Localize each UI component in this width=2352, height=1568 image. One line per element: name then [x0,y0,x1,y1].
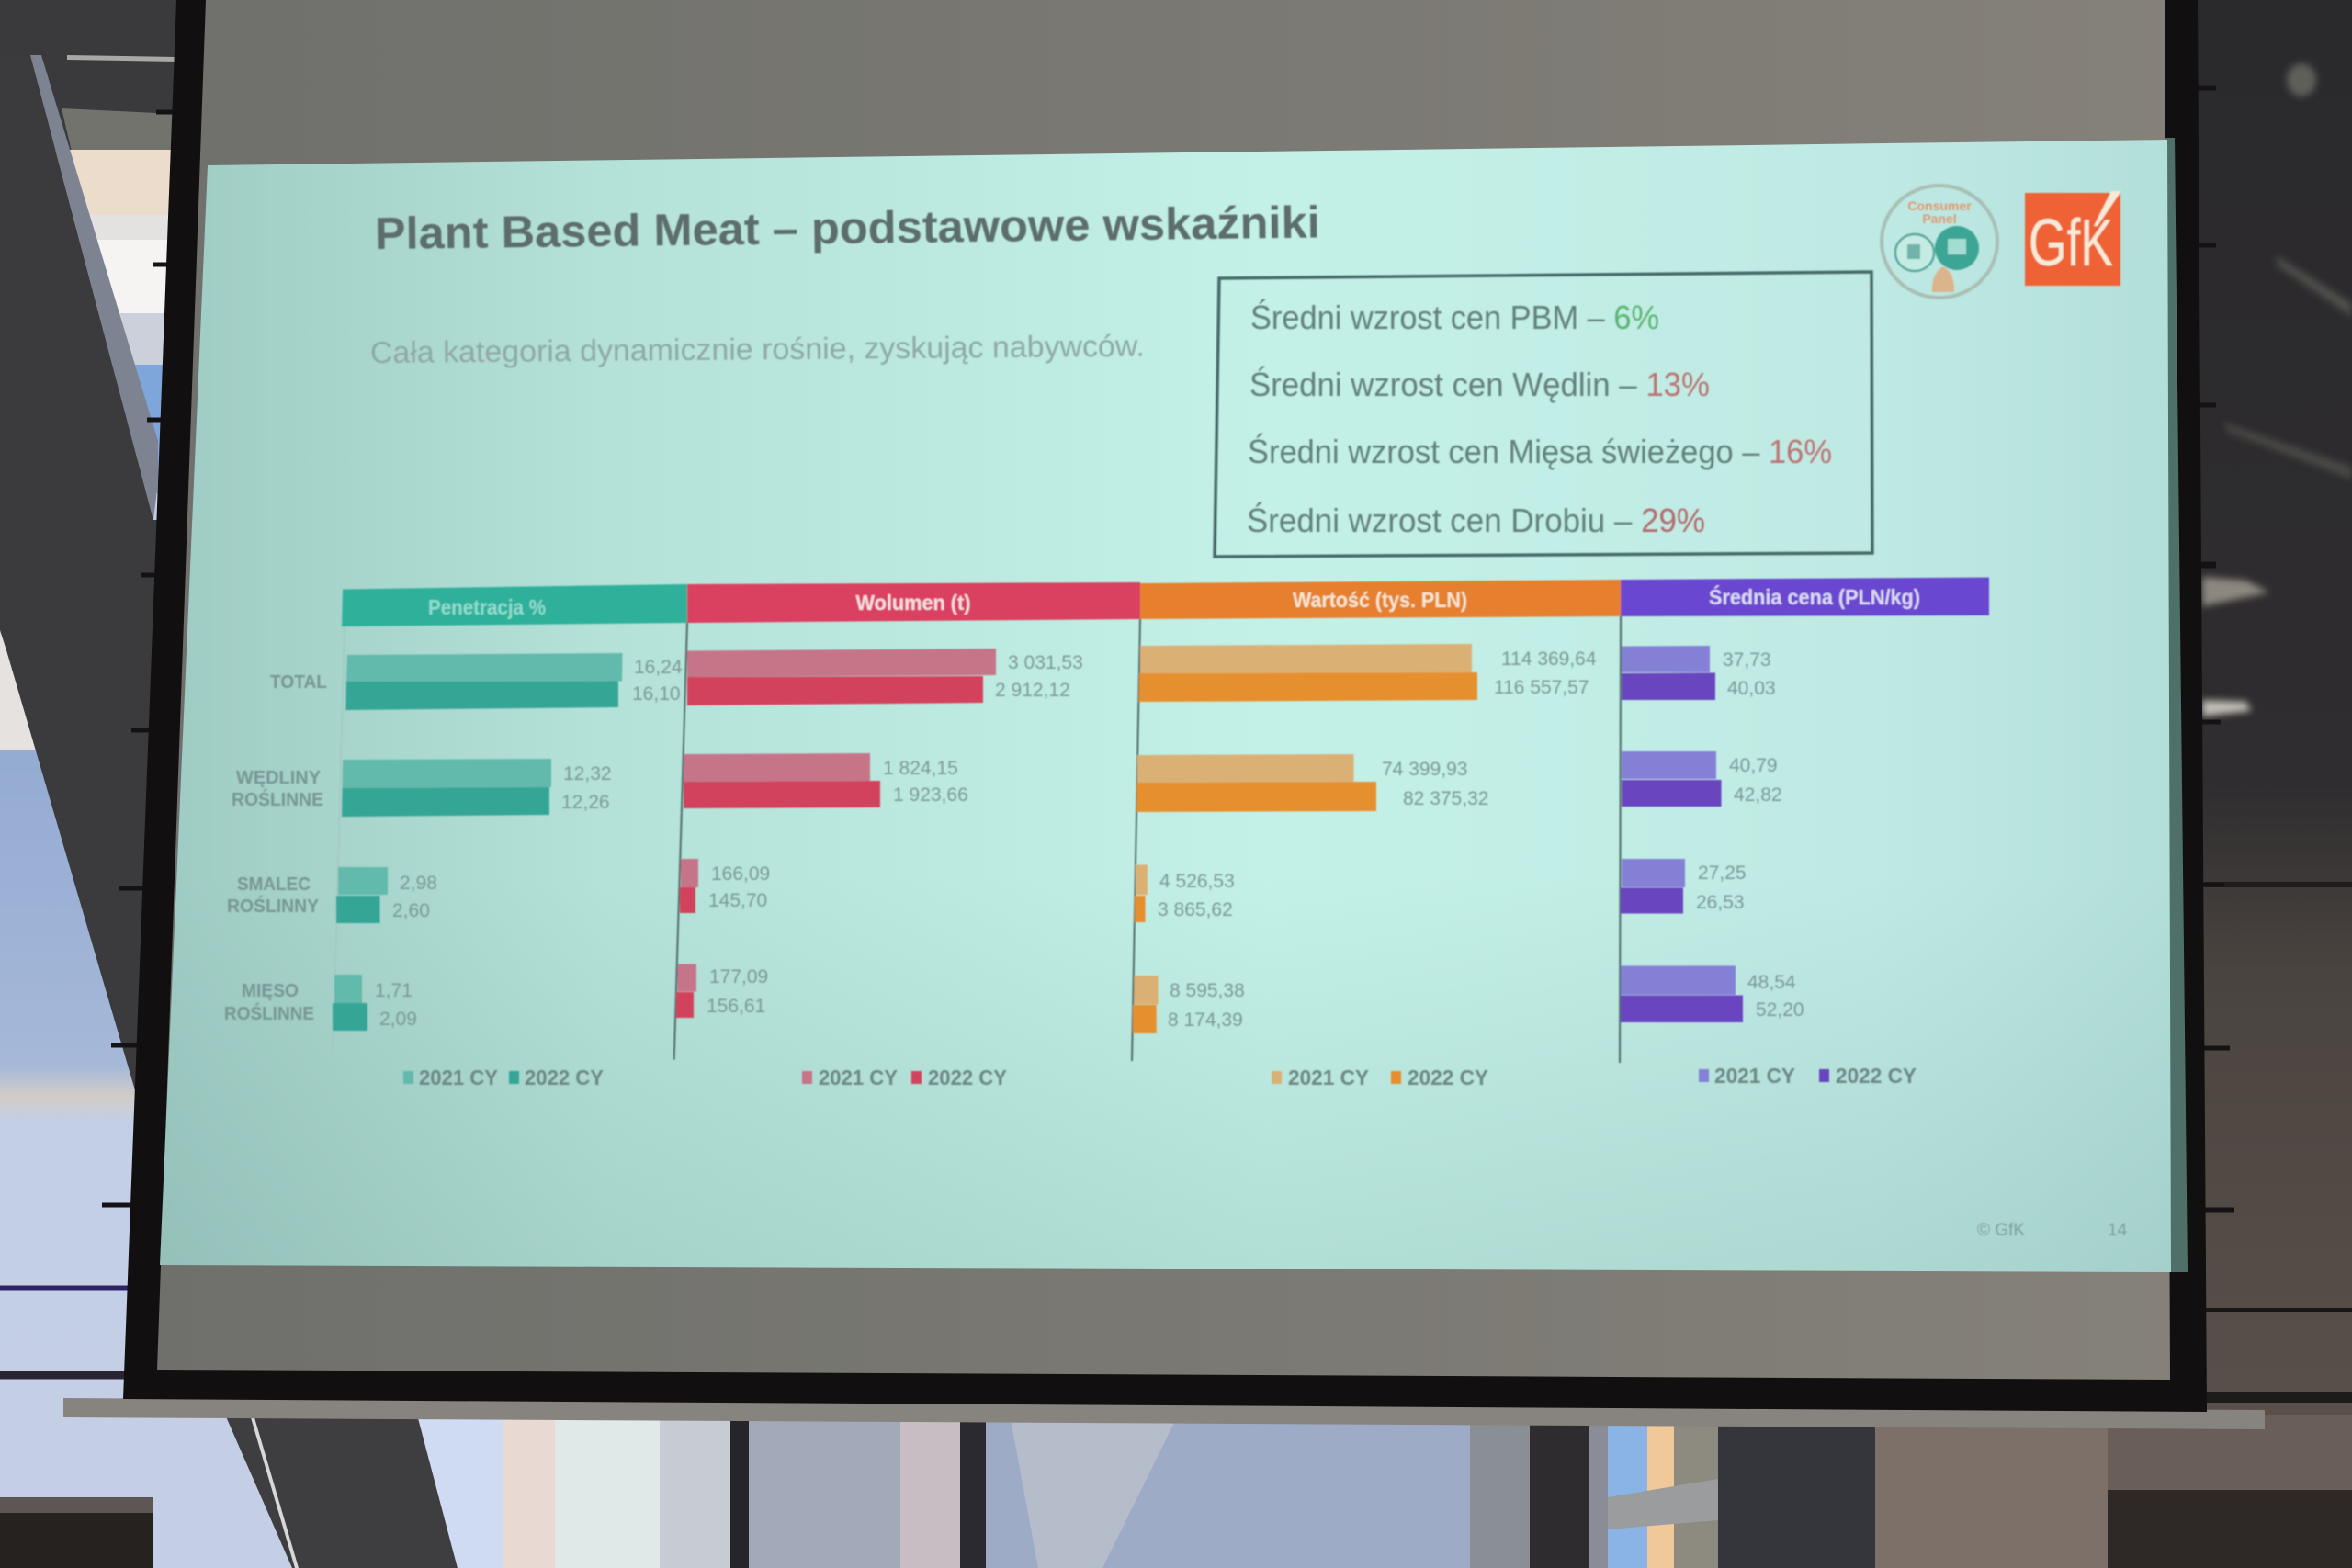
slide background [160,140,2171,1272]
background: below the screen [0,1415,2352,1568]
chart: Wolumen (t) [674,623,1083,1060]
chart: Średnia cena (PLN/kg): 42,82 [1734,784,1782,806]
chart: Penetracja %: 2,09 [379,1009,417,1030]
legend: Wolumen: 2022 CY [928,1066,1007,1089]
chart: Penetracja % [333,626,683,1053]
chart: Penetracja %: 16,24 [634,657,683,678]
chart: Wartość (tys. PLN): 8 174,39 [1168,1010,1243,1031]
slide edge strip [2165,138,2188,1272]
legend: Średnia cena [1699,1064,1917,1088]
chart: Penetracja %: 12,26 [561,792,610,813]
legend: Wartość: 2021 CY [1288,1066,1369,1089]
logo: Consumer Panel: Consumer [1907,198,1972,213]
chart: Średnia cena (PLN/kg): 26,53 [1696,892,1745,913]
header: Wartość: Wartość (tys. PLN) [1293,588,1467,612]
header: Wolumen: Wolumen (t) [856,591,970,615]
callout box: price growth [1215,272,1872,557]
row labels [224,672,327,1024]
background: room left side [0,0,220,1568]
chart: Wolumen (t): 3 031,53 [1008,652,1083,673]
chart: Wolumen (t): 166,09 [711,863,770,885]
chart: Wartość (tys. PLN): 74 399,93 [1382,759,1467,780]
legend: Wartość [1272,1066,1488,1089]
chart: Średnia cena (PLN/kg): 37,73 [1723,649,1771,671]
chart: Średnia cena (PLN/kg): 27,25 [1698,863,1747,884]
legend: Średnia cena: 2022 CY [1836,1064,1917,1088]
chart: Wartość (tys. PLN): 4 526,53 [1159,871,1235,892]
chart: Wolumen (t): 1 923,66 [893,784,968,806]
chart: Wolumen (t): 1 824,15 [883,758,958,779]
screen black frame [123,0,2207,1412]
title: Plant Based Meat – podstawowe wskaźniki [374,197,1320,259]
callout line: PBM: Średni wzrost cen PBM – 6% [1250,298,1659,336]
chart: Wolumen (t): 177,09 [709,966,768,987]
chart: Średnia cena (PLN/kg): 48,54 [1747,972,1796,993]
chart: Średnia cena (PLN/kg): 40,79 [1729,755,1778,776]
header: Wolumen [687,582,1140,623]
slide lower shading [160,140,2171,1272]
callout line: Mięsa świeżego: Średni wzrost cen Mięsa świeżego – 16% [1248,432,1832,470]
grey screen surface [157,0,2170,1380]
legend: Penetracja [403,1066,604,1089]
legend: Wolumen: 2021 CY [819,1066,898,1089]
row label: WĘDLINY ROŚLINNE: ROŚLINNE [232,788,323,810]
chart: Wartość (tys. PLN): 116 557,57 [1494,677,1589,698]
chart: Wartość (tys. PLN): 82 375,32 [1403,788,1488,809]
logo: GfK [2025,191,2121,286]
table column headers [342,577,1989,626]
legend: Wolumen [802,1066,1007,1089]
logo: Consumer Panel: Panel [1922,211,1957,226]
row label: SMALEC ROŚLINNY [227,874,320,917]
row label: TOTAL: TOTAL [270,672,327,693]
legend: Średnia cena: 2021 CY [1714,1064,1795,1088]
chart: Wartość (tys. PLN): 114 369,64 [1501,649,1597,670]
mounting ticks on the screen frame [0,88,2234,1375]
logo: Consumer Panel [1882,186,1997,298]
chart: Penetracja %: 2,98 [400,873,437,894]
row label: WĘDLINY ROŚLINNE [232,768,323,810]
header: Średnia cena: Średnia cena (PLN/kg) [1709,584,1920,609]
footer: copyright: © GfK [1977,1221,2025,1240]
screen rail [63,1398,2265,1429]
background: room right side [2191,0,2352,1568]
chart: Wartość (tys. PLN): 3 865,62 [1158,899,1233,920]
row label: MIĘSO ROŚLINNE: MIĘSO [242,981,299,1001]
footer: page number: 14 [2108,1221,2128,1240]
chart: Średnia cena (PLN/kg): 52,20 [1756,999,1804,1021]
chart: Średnia cena (PLN/kg): 40,03 [1727,678,1776,699]
chart: Wolumen (t): 2 912,12 [995,680,1070,701]
row label: MIĘSO ROŚLINNE [224,981,314,1024]
legend: Penetracja: 2022 CY [525,1066,604,1089]
row label: WĘDLINY ROŚLINNE: WĘDLINY [236,768,322,788]
chart: Wartość (tys. PLN): 8 595,38 [1170,980,1245,1001]
legend: Penetracja: 2021 CY [419,1066,498,1089]
chart: Penetracja %: 2,60 [392,900,430,921]
row label: SMALEC ROŚLINNY: SMALEC [237,874,311,895]
row label: SMALEC ROŚLINNY: ROŚLINNY [227,895,320,917]
slide content [224,186,2128,1240]
chart: Penetracja %: 1,71 [375,980,413,1001]
logo: GfK: GfK [2029,207,2113,280]
callout line: Drobiu: Średni wzrost cen Drobiu – 29% [1247,501,1705,539]
legend: Wartość: 2022 CY [1408,1066,1488,1089]
header: Penetracja: Penetracja % [428,595,546,619]
row label: MIĘSO ROŚLINNE: ROŚLINNE [224,1002,314,1024]
callout line: Wędlin: Średni wzrost cen Wędlin – 13% [1250,365,1710,403]
header: Średnia cena [1621,577,1989,616]
chart: Penetracja %: 12,32 [563,763,612,784]
chart: Średnia cena (PLN/kg) [1620,616,1804,1063]
chart: Penetracja %: 16,10 [632,683,681,705]
chart: Wolumen (t): 156,61 [707,996,765,1017]
chart: Wolumen (t): 145,70 [708,890,767,911]
header: Wartość [1140,580,1621,619]
chart: Wartość (tys. PLN) [1132,619,1597,1061]
header: Penetracja [342,584,687,626]
subtitle: Cała kategoria dynamicznie rośnie, zyskując nabywców. [370,329,1145,369]
